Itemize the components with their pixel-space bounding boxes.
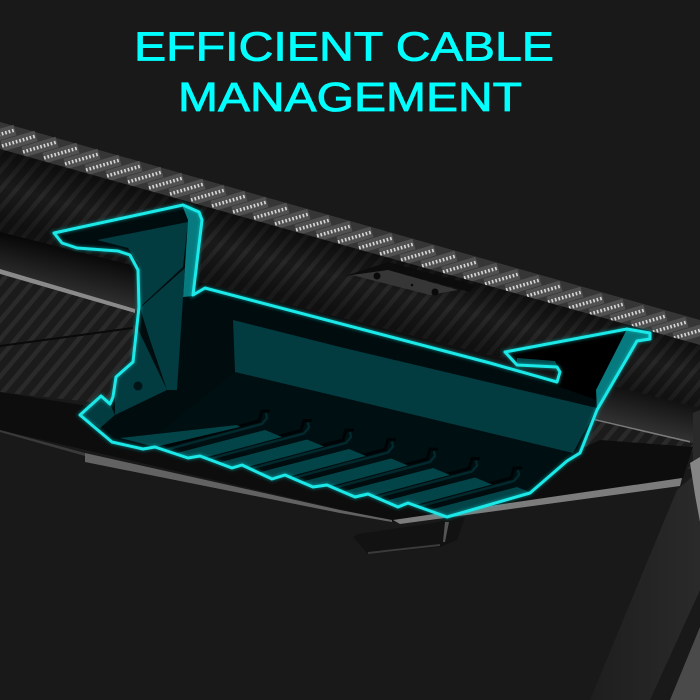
cable tray	[50, 200, 660, 524]
bracket lit strip	[182, 206, 200, 297]
bracket middle panel	[140, 268, 185, 390]
silver rail line right	[595, 419, 690, 444]
bracket lower panel	[115, 327, 167, 415]
neon outline	[54, 205, 650, 517]
title: EFFICIENT CABLE	[134, 24, 554, 70]
bracket foot	[82, 398, 115, 428]
mounting plate	[352, 270, 458, 296]
desk leg	[590, 410, 700, 700]
under-desk hook	[353, 517, 465, 554]
tray floor pads	[120, 425, 534, 524]
dark lower band	[0, 392, 693, 523]
silver rail line left	[0, 269, 135, 313]
tray body	[50, 200, 660, 524]
silver front beam	[393, 478, 682, 524]
glossy rail	[0, 232, 700, 445]
right hook lit face	[517, 358, 557, 366]
screw	[134, 382, 142, 390]
right bracket lit strip	[596, 329, 650, 410]
plate shadow	[345, 262, 475, 292]
tray lower wall	[150, 372, 573, 493]
silver lower edge	[85, 453, 392, 522]
title: MANAGEMENT	[178, 74, 522, 120]
silver lower edge faint	[0, 430, 85, 456]
outer glow	[54, 205, 650, 517]
right bracket dark panel	[510, 331, 626, 400]
tray back wall	[233, 320, 597, 453]
lower carbon panel	[0, 274, 700, 470]
rib hook shadows	[169, 410, 522, 484]
dotted desk edge strip	[0, 122, 700, 345]
bracket upper panel	[97, 222, 188, 307]
title	[134, 24, 554, 120]
rib hooks	[165, 413, 519, 507]
carbon fibre face	[0, 149, 700, 408]
